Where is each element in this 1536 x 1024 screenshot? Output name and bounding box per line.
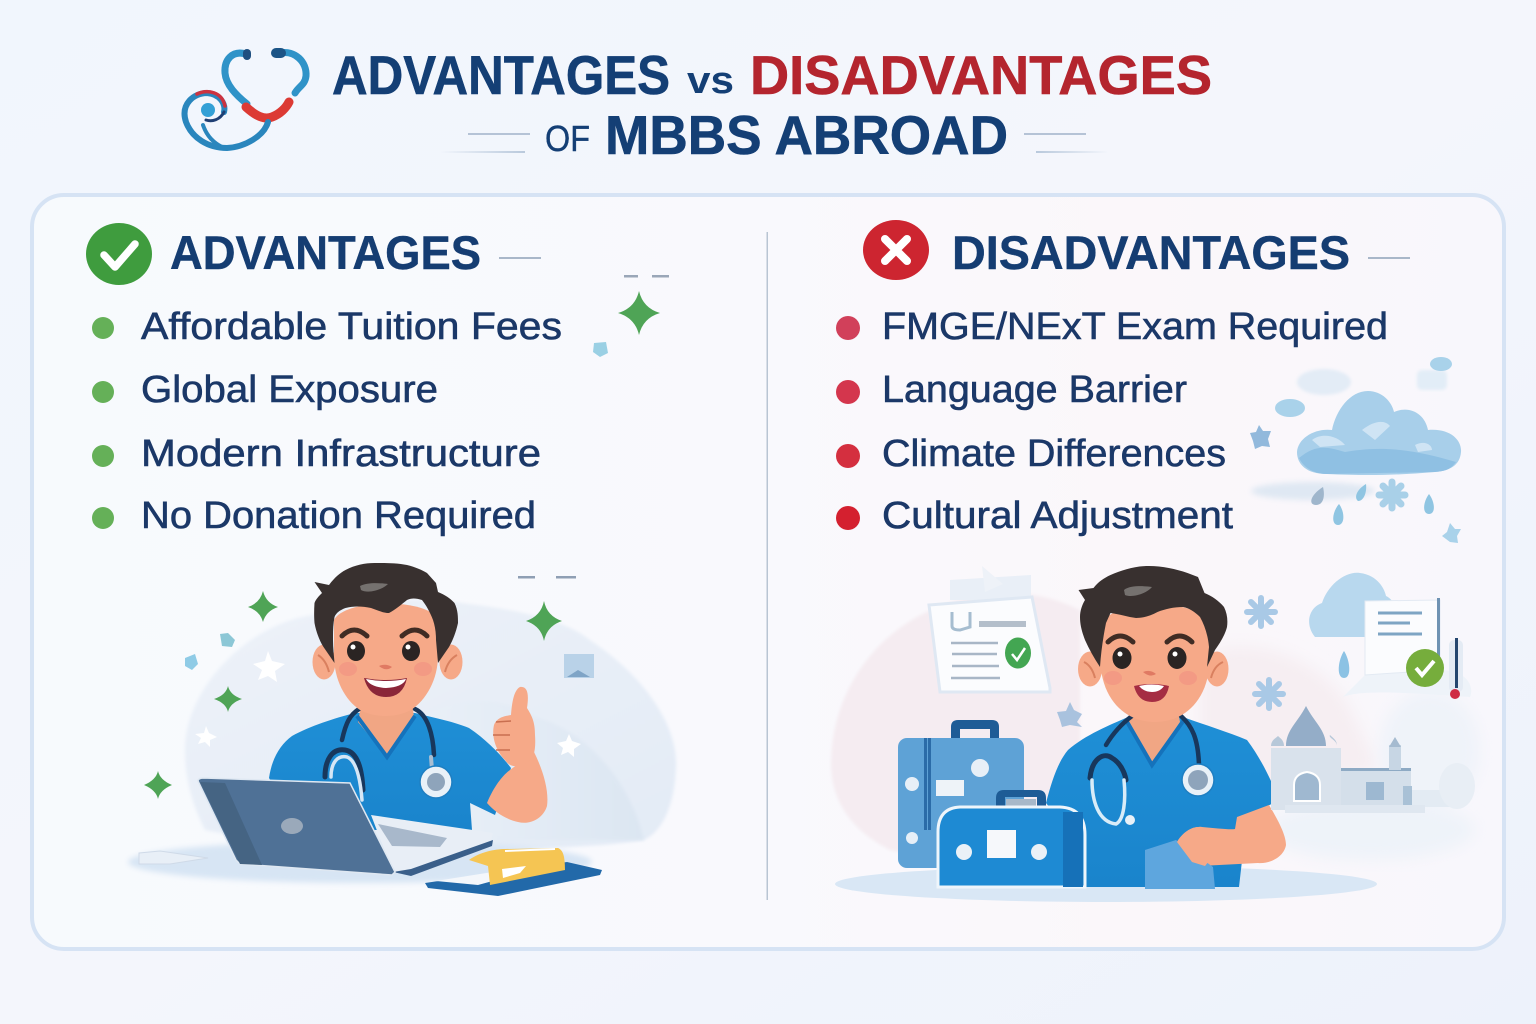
- mosque: [1271, 706, 1475, 813]
- list: advantages: No Donation Required: [141, 495, 536, 537]
- title: ADVANTAGES: [332, 44, 670, 106]
- sparkles: [144, 591, 562, 799]
- title: [332, 44, 1212, 166]
- list: advantages: [92, 306, 562, 537]
- title: DISADVANTAGES: [750, 44, 1212, 106]
- book and notebook: [425, 862, 602, 896]
- title: MBBS ABROAD: [605, 104, 1008, 166]
- stethoscope right: [1090, 716, 1199, 824]
- panel: disadvantages: [831, 220, 1480, 902]
- list: disadvantages: [836, 306, 1388, 537]
- list: disadvantages: Climate Differences: [882, 433, 1226, 475]
- neck and collar: [358, 700, 414, 757]
- logo: stethoscope: [185, 53, 306, 148]
- heading: disadvantages: DISADVANTAGES: [952, 226, 1350, 279]
- list: disadvantages: Cultural Adjustment: [882, 495, 1233, 537]
- illustration: student with luggage, documents and mosque: [831, 566, 1480, 902]
- head right: [1078, 652, 1102, 686]
- panel: advantages: [86, 223, 676, 896]
- illustration: happy student with laptop: [128, 563, 676, 896]
- title: OF: [545, 118, 590, 159]
- list: disadvantages: FMGE/NExT Exam Required: [882, 306, 1388, 348]
- panel: main card: [32, 195, 1504, 949]
- heading: advantages: ADVANTAGES: [170, 226, 481, 279]
- icon: green check: [86, 223, 152, 285]
- laptop: [371, 815, 493, 875]
- list: advantages: Modern Infrastructure: [141, 433, 541, 475]
- stethoscope: [325, 709, 434, 800]
- scrubs: [269, 713, 511, 830]
- snowflakes and star: [1057, 598, 1283, 727]
- title: vs: [687, 60, 734, 102]
- icon: red cross: [863, 220, 929, 280]
- arm and hand right: [1177, 805, 1286, 866]
- icon: weather cloud: [1250, 357, 1461, 543]
- suitcase front: [938, 790, 1085, 887]
- list: advantages: Global Exposure: [141, 369, 438, 411]
- suitcase back: [898, 720, 1024, 868]
- list: advantages: Affordable Tuition Fees: [141, 306, 562, 348]
- scrubs right: [1046, 717, 1279, 887]
- arm and thumbs up: [487, 752, 547, 823]
- list: disadvantages: Language Barrier: [882, 369, 1187, 411]
- icon: sparkle decoration: [593, 275, 669, 357]
- document with check: [929, 566, 1050, 692]
- cloud, document and thermometer: [1309, 573, 1471, 699]
- head: [312, 644, 336, 680]
